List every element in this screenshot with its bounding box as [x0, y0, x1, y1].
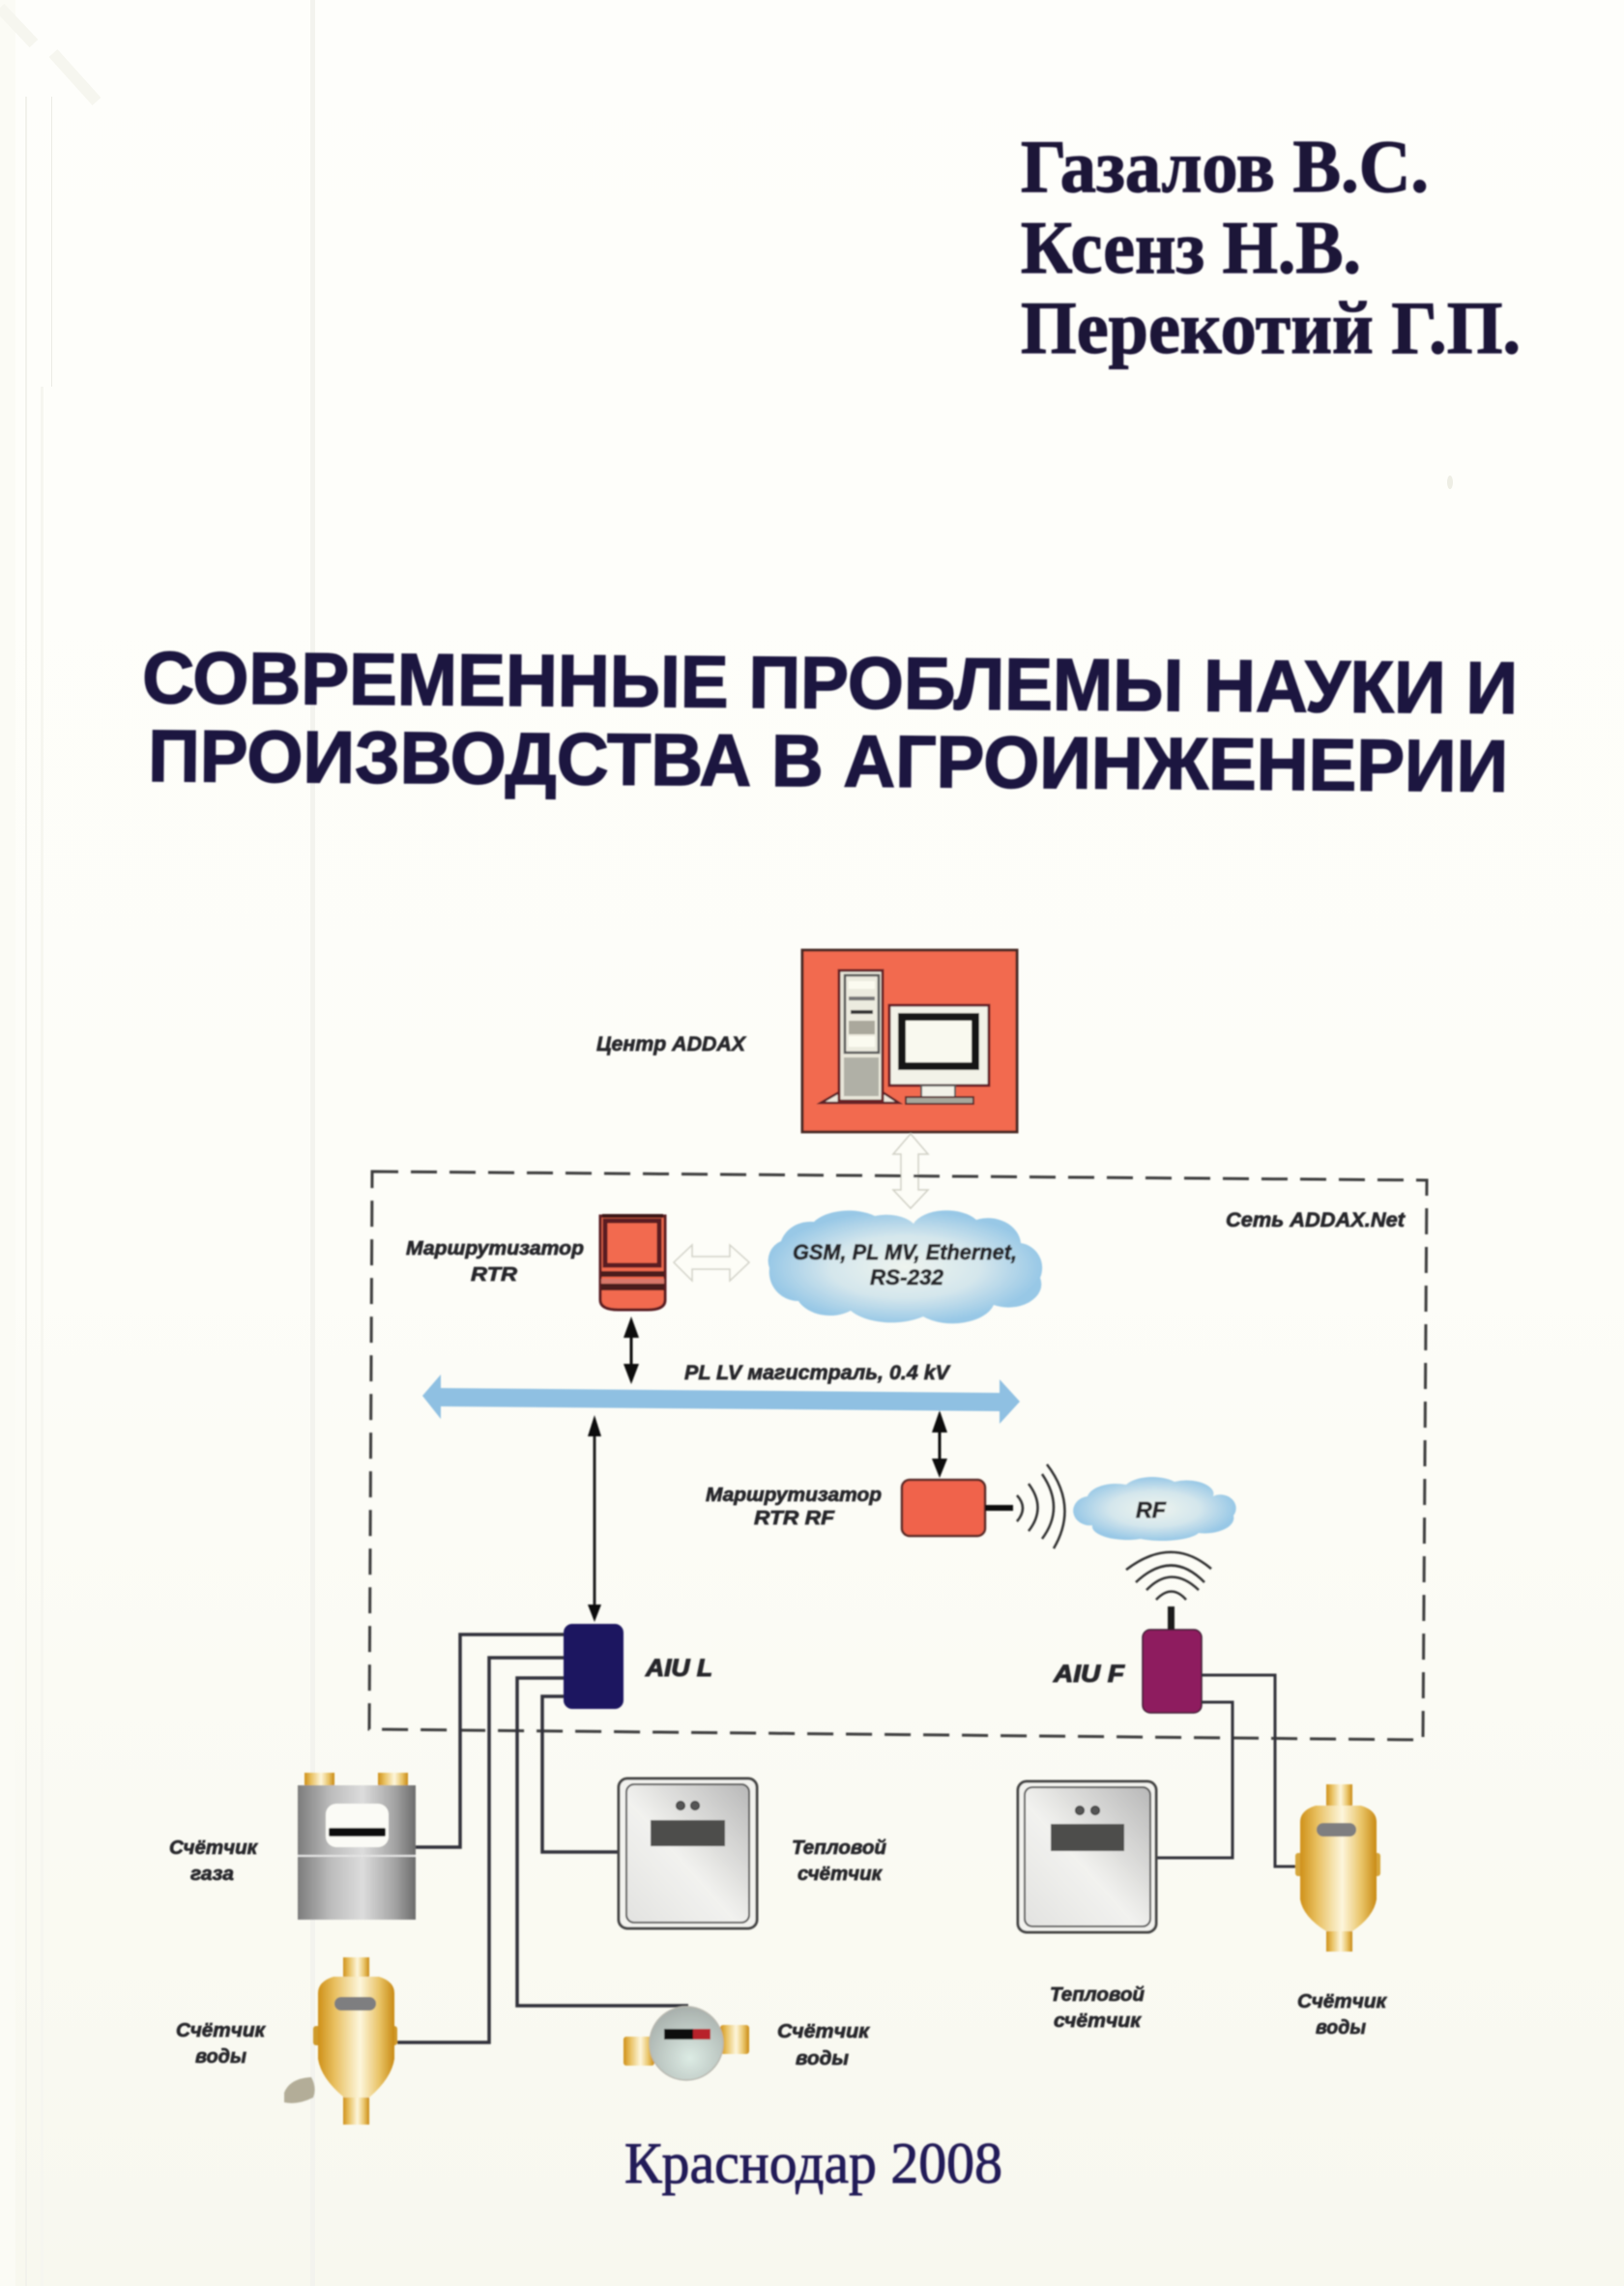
cloud: GSM PL MV Ethernet RS-232	[768, 1210, 1042, 1323]
label: water meter right: воды	[1316, 2017, 1366, 2039]
label: router RTR RF: RTR RF	[754, 1508, 835, 1529]
label: heat meter right: Тепловой	[1050, 1984, 1145, 2006]
title line 1: СОВРЕМЕННЫЕ ПРОБЛЕМЫ НАУКИ И	[142, 637, 1518, 730]
label: heat meter left	[792, 1837, 886, 1885]
arrow: bus to AIU L	[588, 1415, 601, 1622]
icon: ADDAX centre computer	[802, 950, 1017, 1132]
label: ADDAX.Net: Сеть ADDAX.Net	[1226, 1209, 1406, 1231]
label: gas meter: газа	[190, 1864, 234, 1885]
publisher city and year: Краснодар 2008	[624, 2131, 1002, 2195]
cloud: GSM PL MV Ethernet RS-232: GSM, PL MV, Ethernet,	[793, 1240, 1017, 1264]
label: water meter left	[176, 2020, 266, 2068]
label: AIU L: AIU L	[645, 1655, 712, 1682]
label: PL LV bus: PL LV магистраль, 0.4 kV	[684, 1362, 951, 1384]
network diagram	[169, 950, 1427, 2125]
label: water meter small	[777, 2021, 870, 2069]
icon: water meter left	[313, 1957, 397, 2125]
label: gas meter	[169, 1837, 258, 1885]
label: router RTR: RTR	[471, 1264, 518, 1286]
label: water meter small: воды	[796, 2048, 849, 2069]
icon: AIU F unit	[1126, 1552, 1211, 1713]
icon: router RTR RF	[902, 1464, 1064, 1548]
authors block	[1021, 125, 1521, 369]
label: water meter left: воды	[195, 2046, 246, 2068]
label: ADDAX centre: Центр ADDAX	[596, 1033, 747, 1056]
arrow: centre to cloud	[893, 1134, 928, 1208]
label: heat meter right: счётчик	[1054, 2011, 1142, 2032]
label: water meter right: Счётчик	[1297, 1991, 1387, 2012]
cloud: RF: RF	[1136, 1497, 1167, 1522]
arrow: PL LV bus	[422, 1374, 1020, 1424]
icon: heat meter left	[619, 1779, 757, 1928]
dashed ADDAX.Net boundary	[369, 1172, 1427, 1740]
author: Gazalov: Газалов В.С.	[1021, 125, 1429, 208]
label: water meter right	[1297, 1991, 1387, 2039]
label: router RTR RF	[706, 1485, 882, 1529]
paper smudge	[284, 2077, 315, 2103]
author: Perekotiy: Перекотий Г.П.	[1021, 286, 1521, 369]
wires from AIU F	[1157, 1675, 1300, 1866]
label: heat meter right	[1050, 1984, 1145, 2032]
label: heat meter left: Тепловой	[792, 1837, 886, 1859]
arrow: bus to RTR RF	[932, 1410, 947, 1478]
icon: AIU L unit	[564, 1624, 624, 1709]
arrow: router to bus	[624, 1317, 639, 1384]
wires from AIU L	[397, 1635, 688, 2042]
label: AIU F: AIU F	[1053, 1661, 1125, 1688]
title line 2: ПРОИЗВОДСТВА В АГРОИНЖЕНЕРИИ	[148, 715, 1508, 808]
label: water meter small: Счётчик	[777, 2021, 870, 2042]
label: router RTR	[406, 1238, 584, 1286]
label: router RTR: Маршрутизатор	[406, 1238, 584, 1259]
icon: water meter right	[1295, 1784, 1380, 1952]
cloud: RF	[1073, 1477, 1236, 1541]
author: Ksenz: Ксенз Н.В.	[1021, 206, 1361, 289]
icon: router RTR	[600, 1214, 665, 1310]
cloud: GSM PL MV Ethernet RS-232: RS-232	[870, 1265, 944, 1289]
label: water meter left: Счётчик	[176, 2020, 266, 2041]
icon: heat meter right	[1018, 1781, 1156, 1932]
label: gas meter: Счётчик	[169, 1837, 258, 1859]
label: router RTR RF: Маршрутизатор	[706, 1485, 882, 1506]
title	[142, 637, 1518, 808]
label: heat meter left: счётчик	[798, 1864, 883, 1885]
icon: gas meter	[298, 1773, 416, 1920]
arrow: router to cloud	[674, 1245, 749, 1281]
icon: water meter small horizontal	[624, 2007, 749, 2080]
